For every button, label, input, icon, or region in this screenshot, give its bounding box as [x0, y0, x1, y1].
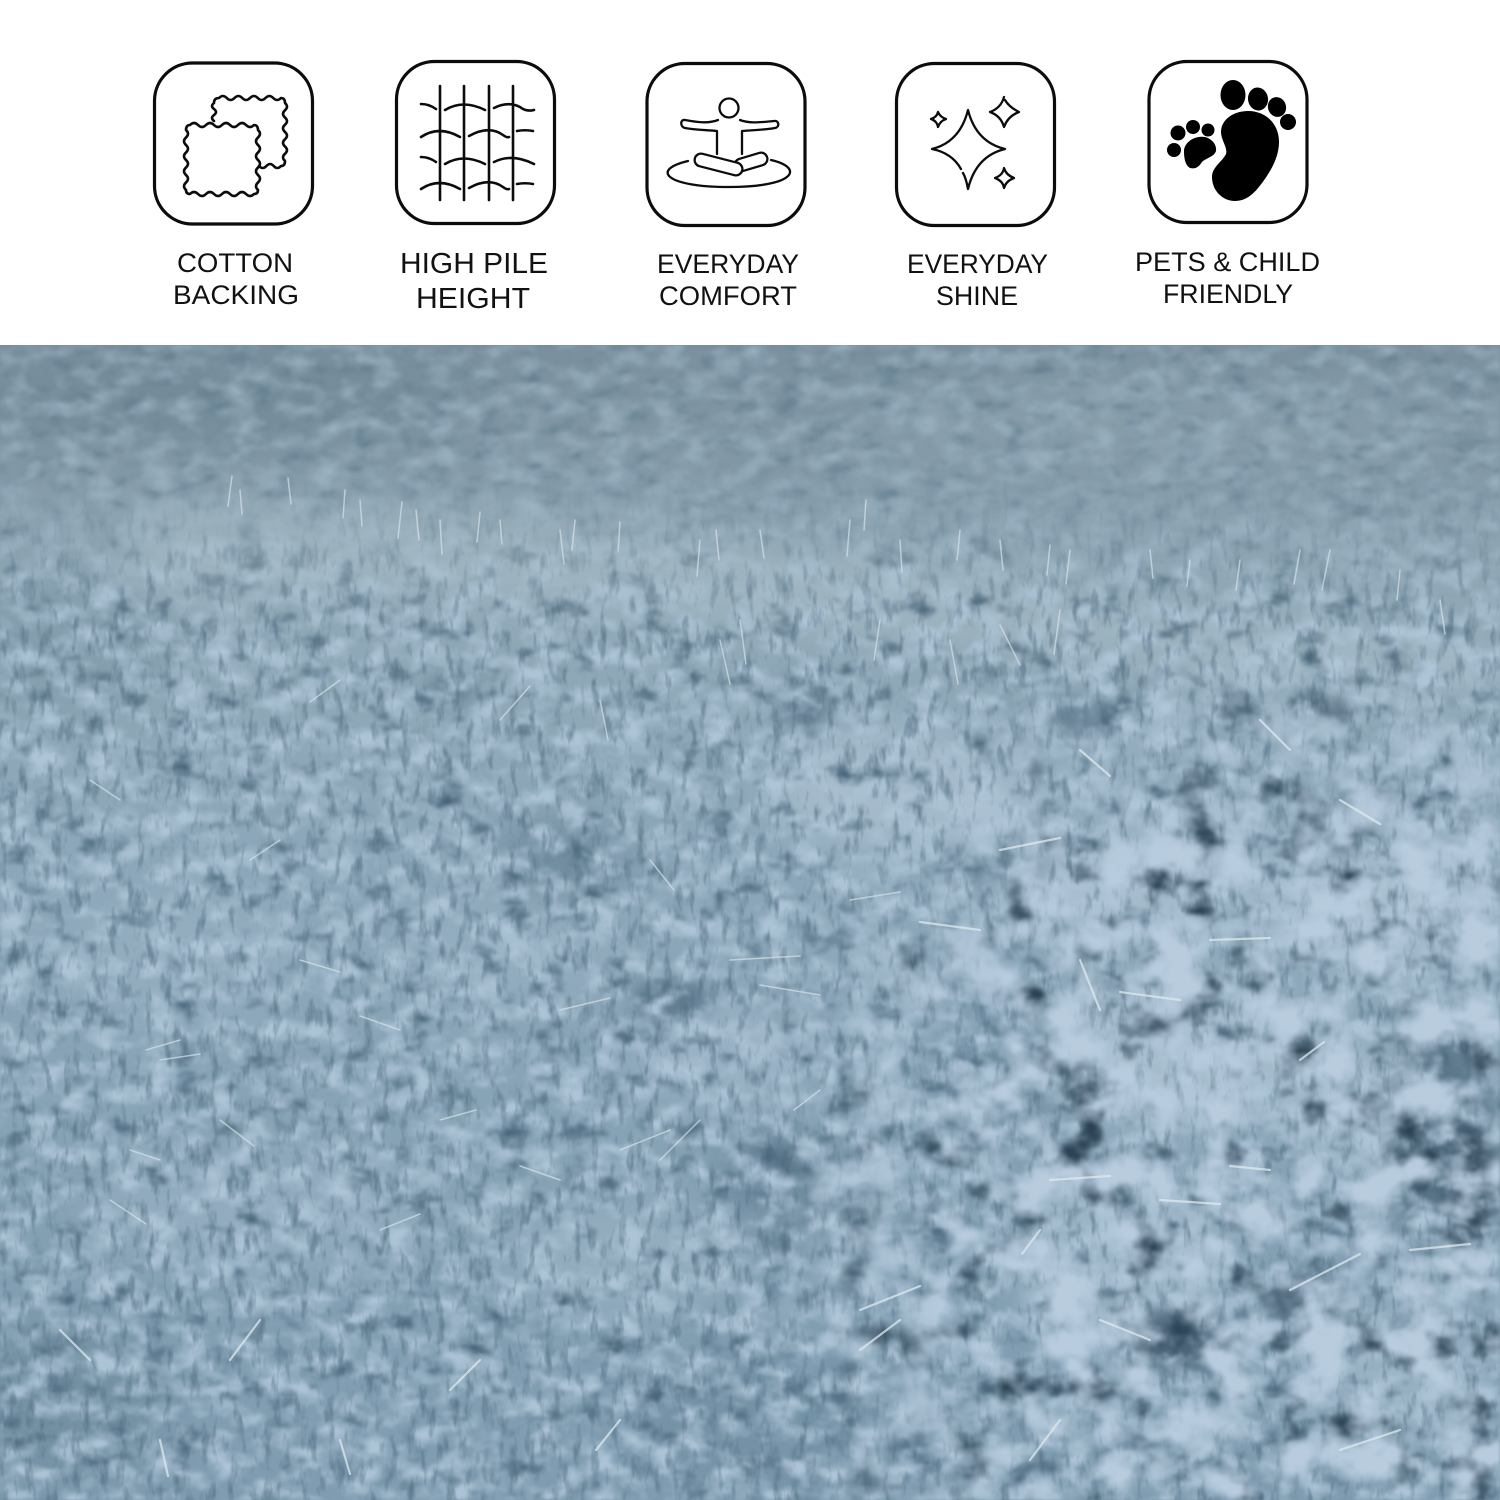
label: everyday shine: SHINE: [936, 281, 1018, 311]
icon: two wavy fabric swatches: [184, 96, 287, 196]
icon: sparkles: [931, 97, 1019, 189]
icon tile: high pile height: [396, 62, 554, 224]
label: pets and child friendly: [1135, 247, 1320, 309]
label: high pile height: HEIGHT: [416, 283, 530, 315]
label: everyday shine: EVERYDAY: [907, 249, 1048, 279]
icon tile: everyday comfort: [647, 64, 805, 226]
label: high pile height: [400, 248, 548, 315]
label: everyday shine: [907, 249, 1048, 311]
icon: meditating figure on round mat: [668, 98, 790, 187]
label: pets and child friendly: PETS & CHILD: [1135, 247, 1320, 277]
icon tile: pets and child friendly: [1149, 62, 1307, 222]
icon: pile fibres and weave: [421, 86, 534, 200]
label: cotton backing: [173, 248, 299, 310]
icon tile: cotton backing: [154, 63, 312, 224]
label: everyday comfort: COMFORT: [659, 281, 797, 311]
label: cotton backing: COTTON: [177, 248, 293, 278]
label: pets and child friendly: FRIENDLY: [1163, 279, 1293, 309]
label: everyday comfort: [657, 249, 799, 311]
label: everyday comfort: EVERYDAY: [657, 249, 799, 279]
icon tile: everyday shine: [896, 64, 1054, 226]
photo: blue shag rug close-up: [0, 345, 1500, 1500]
icon: child footprint and paw print: [1167, 80, 1296, 201]
label: cotton backing: BACKING: [173, 280, 299, 310]
label: high pile height: HIGH PILE: [400, 248, 548, 280]
